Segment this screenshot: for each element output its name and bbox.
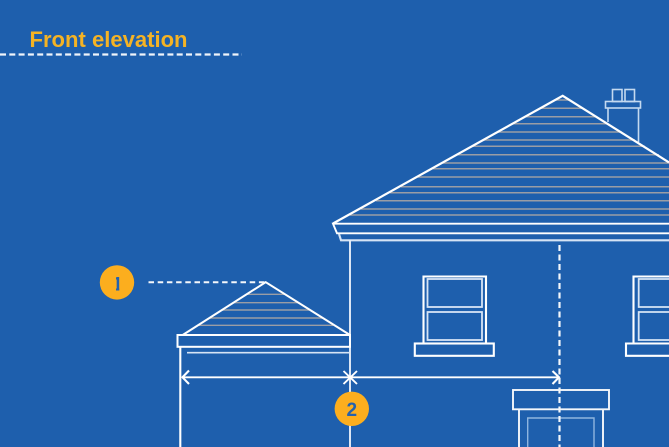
badge 1: 1 [112,274,123,296]
extension wall [179,347,181,447]
left window [415,276,494,356]
badge 2 [335,392,369,426]
title: Front elevation [30,27,188,52]
house drawing [178,90,669,447]
roof outline [333,96,669,224]
main roof [333,90,669,240]
centre line [558,245,561,447]
dimension arrows [182,370,559,384]
badge 1 [100,265,134,300]
main wall [349,240,351,447]
title underline [0,53,242,56]
extension roof [178,282,350,353]
door [513,390,609,447]
extension soffit [187,352,350,354]
badge 2: 2 [347,400,357,421]
right window [626,276,669,356]
extension tile lines [199,294,333,325]
chimney [606,90,640,142]
callout leader 1 [148,281,265,283]
eaves [333,224,669,240]
extension fascia [178,335,350,347]
roof tile lines [350,100,669,215]
extension roof outline [183,282,350,335]
